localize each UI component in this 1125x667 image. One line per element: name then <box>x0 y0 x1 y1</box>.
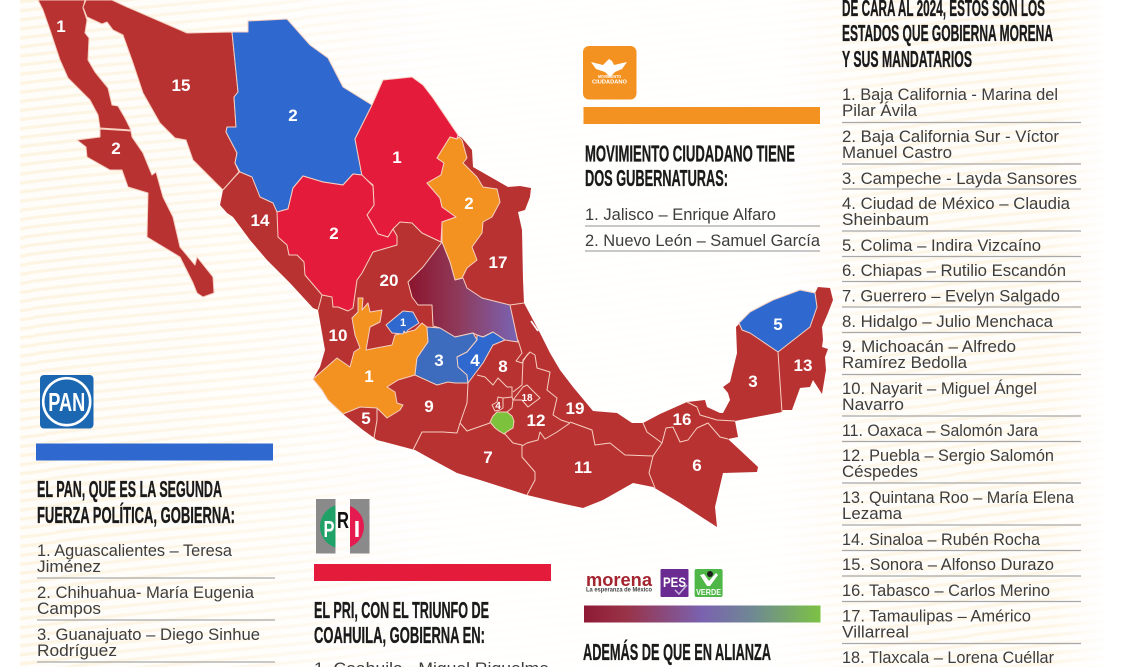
colour bar: PAN <box>36 444 273 460</box>
heading: PRI <box>314 597 489 648</box>
list: Morena governors <box>842 85 1081 667</box>
map labels: number of each state: 2 <box>329 224 339 243</box>
list: PAN governors: Jiménez <box>37 557 101 576</box>
map labels: number of each state <box>56 17 812 477</box>
list: Morena governors: Manuel Castro <box>842 143 952 162</box>
list: Morena governors: Ramírez Bedolla <box>842 353 968 372</box>
map labels: number of each state: 12 <box>527 411 545 430</box>
state: San Luis Potosí <box>408 242 518 342</box>
map of Mexico <box>38 0 833 527</box>
icon: PAN logo <box>40 375 94 428</box>
list: PAN governors: 2. Chihuahua- María Eugenia <box>37 583 255 602</box>
list: Morena governors: Lezama <box>842 504 903 523</box>
list: Morena governors: 16. Tabasco – Carlos Merino <box>842 581 1050 600</box>
panel: PAN <box>36 375 275 662</box>
list: Morena governors: Pilar Ávila <box>842 101 918 120</box>
icon: Movimiento Ciudadano logo <box>583 46 636 100</box>
icon: PRI logo: R <box>337 507 349 533</box>
colour bar: alliance <box>584 606 820 622</box>
list: Morena governors: Sheinbaum <box>842 210 929 229</box>
map labels: number of each state: 18 <box>521 393 533 404</box>
state: Coahuila <box>355 77 458 242</box>
state: Baja California <box>38 0 131 130</box>
panel: Morena states <box>842 0 1081 667</box>
state: Guanajuato <box>415 327 477 385</box>
list: PAN governors: 3. Guanajuato – Diego Sinhue <box>37 625 260 644</box>
icon: Morena logo: La esperanza de México <box>586 588 652 594</box>
map labels: number of each state: 3 <box>434 351 444 370</box>
list: Morena governors: 9. Michoacán – Alfredo <box>842 337 1016 356</box>
state: Morelos <box>490 412 514 434</box>
list: Morena governors: 1. Baja California - Marina del <box>842 85 1058 104</box>
list: Morena governors: 2. Baja California Sur - Víctor <box>842 127 1059 146</box>
colour bar: MC <box>584 107 820 124</box>
state: Ciudad de México <box>492 397 503 411</box>
list: Morena governors: 6. Chiapas – Rutilio Escandón <box>842 261 1066 280</box>
list: Morena governors: 17. Tamaulipas – Américo <box>842 606 1031 626</box>
icon: PRI logo: I <box>354 516 360 542</box>
icon: Morena logo: morena <box>586 570 653 590</box>
map labels: number of each state: 1 <box>364 367 374 386</box>
colour bar: PRI <box>314 564 551 581</box>
list: Morena governors: 12. Puebla – Sergio Salomón <box>842 446 1054 465</box>
map labels: number of each state: 6 <box>692 456 702 475</box>
heading: alliance: ADEMÁS DE QUE EN ALIANZA <box>583 638 771 665</box>
map labels: number of each state: 11 <box>574 458 592 477</box>
list: Morena governors: 3. Campeche - Layda Sansores <box>842 169 1077 188</box>
mainland Morena states <box>220 135 833 527</box>
map labels: number of each state: 1 <box>400 317 406 329</box>
heading: PRI: EL PRI, CON EL TRIUNFO DE <box>314 597 489 623</box>
state: Sonora <box>83 0 239 190</box>
icon: Verde logo <box>695 569 723 597</box>
list: PAN governors: 1. Aguascalientes – Teresa <box>37 541 233 560</box>
list: Morena governors: Navarro <box>842 395 904 414</box>
map labels: number of each state: 1 <box>56 17 66 36</box>
list: Morena governors: 10. Nayarit – Miguel Ángel <box>842 379 1037 398</box>
state: Yucatán <box>739 290 817 352</box>
list: Morena governors: Céspedes <box>842 462 918 481</box>
map labels: number of each state: 10 <box>329 326 347 345</box>
map labels: number of each state: 4 <box>495 401 501 412</box>
state: Nuevo León <box>427 137 500 280</box>
map labels: number of each state: 17 <box>489 253 507 272</box>
icon: Verde logo: VERDE <box>696 588 722 597</box>
map labels: number of each state: 5 <box>773 315 783 334</box>
heading: PAN: EL PAN, QUE ES LA SEGUNDA <box>37 476 222 502</box>
list: MC governors: 2. Nuevo León – Samuel García <box>585 231 821 250</box>
map labels: number of each state: 8 <box>498 357 508 376</box>
panel: alliance <box>583 569 820 665</box>
heading: MC <box>585 140 795 191</box>
map labels: number of each state: 9 <box>424 397 434 416</box>
interior state borders <box>223 172 782 495</box>
map labels: number of each state: 2 <box>464 194 474 213</box>
heading: MC: MOVIMIENTO CIUDADANO TIENE <box>585 140 795 166</box>
state: Jalisco <box>313 298 428 418</box>
map labels: number of each state: 7 <box>483 448 493 467</box>
map labels: number of each state: 13 <box>794 356 812 375</box>
list: Morena governors: 15. Sonora – Alfonso Durazo <box>842 555 1054 574</box>
map labels: number of each state: 19 <box>566 399 584 418</box>
map labels: number of each state: 14 <box>251 211 270 230</box>
map labels: number of each state: 5 <box>361 409 371 428</box>
list: Morena governors: 18. Tlaxcala – Lorena Cuéllar <box>842 648 1054 667</box>
list: Morena governors: 13. Quintana Roo – María Elena <box>842 488 1075 507</box>
map labels: number of each state: 15 <box>172 76 190 95</box>
state: Durango <box>277 174 397 311</box>
list: MC governors <box>585 205 821 251</box>
icon: PES logo <box>660 569 688 597</box>
icon: PRI logo <box>316 499 370 554</box>
list: PAN governors: Rodríguez <box>37 641 117 660</box>
list: MC governors: 1. Jalisco – Enrique Alfaro <box>585 205 776 224</box>
list: Morena governors: 11. Oaxaca – Salomón Jara <box>842 421 1038 440</box>
icon: Movimiento Ciudadano logo: CIUDADANO <box>592 80 628 86</box>
state: Baja California Sur <box>77 129 214 297</box>
heading: PAN <box>37 476 235 528</box>
list: Morena governors: 4. Ciudad de México – Claudia <box>842 194 1071 213</box>
state: Querétaro <box>457 332 505 383</box>
map labels: number of each state: 2 <box>288 106 298 125</box>
heading: MC: DOS GUBERNATURAS: <box>585 165 728 191</box>
list: Morena governors: Villarreal <box>842 622 909 642</box>
map labels: number of each state: 20 <box>380 271 398 290</box>
list: Morena governors: 7. Guerrero – Evelyn Salgado <box>842 286 1060 306</box>
state: Chihuahua <box>226 19 372 212</box>
list: Morena governors: 8. Hidalgo – Julio Menchaca <box>842 312 1054 331</box>
icon: PES logo: PES <box>663 574 686 590</box>
map labels: number of each state: 4 <box>470 351 480 370</box>
icon: Movimiento Ciudadano logo: MOVIMIENTO <box>598 74 621 79</box>
list: Morena governors: 14. Sinaloa – Rubén Rocha <box>842 530 1041 549</box>
map labels: number of each state: 1 <box>392 148 402 167</box>
heading: Morena: Y SUS MANDATARIOS <box>842 46 972 72</box>
icon: PRI logo: P <box>324 516 334 542</box>
panel: Movimiento Ciudadano <box>583 46 821 251</box>
map labels: number of each state: 16 <box>673 410 691 429</box>
map labels: number of each state: 2 <box>111 139 121 158</box>
state: Aguascalientes <box>386 311 419 334</box>
heading: PAN: FUERZA POLÍTICA, GOBIERNA: <box>37 501 235 528</box>
map labels: number of each state: 3 <box>748 372 758 391</box>
list: PAN governors: Campos <box>37 599 101 618</box>
list: PAN governors <box>37 541 275 662</box>
heading: PRI: COAHUILA, GOBIERNA EN: <box>314 622 485 648</box>
heading: Morena <box>842 0 1053 72</box>
icon: PAN logo: PAN <box>48 387 85 417</box>
list: Morena governors: 5. Colima – Indira Vizcaíno <box>842 236 1041 255</box>
panel: PRI <box>314 499 551 667</box>
